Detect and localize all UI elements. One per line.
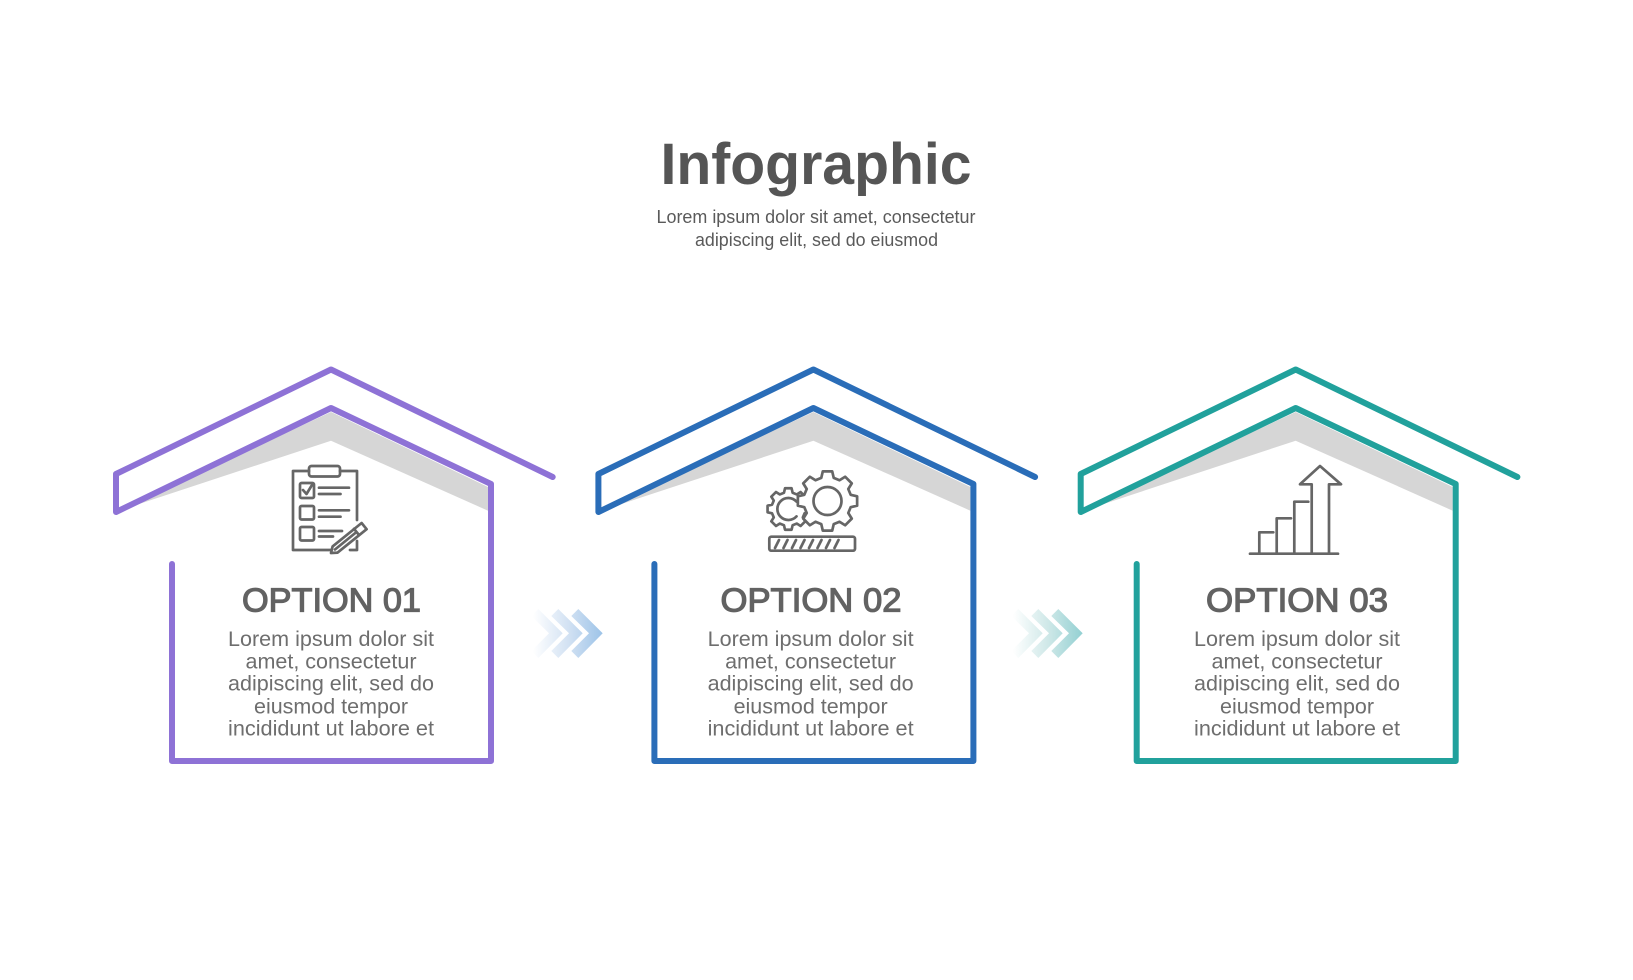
text block: option 01: adipiscing elit, sed do: [228, 672, 434, 696]
text block: option 03: adipiscing elit, sed do: [1194, 672, 1400, 696]
roof shadow: [1085, 412, 1453, 511]
text block: option 02: amet, consectetur: [725, 649, 896, 673]
heading: option 02: OPTION 02: [720, 583, 902, 620]
text block: option 02: adipiscing elit, sed do: [708, 672, 914, 696]
text block: option 02: eiusmod tempor: [734, 694, 888, 718]
text block: option 03: Lorem ipsum dolor sit: [1194, 627, 1400, 651]
arrow: chevrons teal: [1011, 609, 1083, 658]
text block: option 01: incididunt ut labore et: [228, 717, 434, 741]
text block: option 02: incididunt ut labore et: [708, 717, 914, 741]
panel: option 02: [598, 370, 1035, 761]
subtitle: Lorem ipsum dolor sit amet, consectetur: [656, 207, 976, 227]
subtitle: adipiscing elit, sed do eiusmod: [695, 230, 938, 250]
house outline: [116, 370, 553, 761]
text block: option 01: eiusmod tempor: [254, 694, 408, 718]
icon: gears and progress bar: [768, 471, 857, 551]
house outline: [1081, 370, 1517, 761]
text block: option 01: Lorem ipsum dolor sit: [228, 627, 434, 651]
panel: option 03: [1081, 370, 1517, 761]
subtitle: [656, 207, 976, 250]
text block: option 03: [1194, 627, 1400, 741]
icon: rising bar chart with arrow: [1250, 466, 1341, 554]
roof shadow: [602, 412, 970, 511]
text block: option 01: amet, consectetur: [246, 649, 416, 673]
text block: option 03: incididunt ut labore et: [1194, 717, 1400, 741]
roof shadow: [120, 412, 488, 511]
text block: option 01: [228, 627, 434, 741]
icon: clipboard checklist: [293, 466, 367, 553]
text block: option 02: [708, 627, 914, 741]
title: Infographic: [660, 132, 972, 197]
panel: option 01: [116, 370, 553, 761]
house outline: [598, 370, 1035, 761]
text block: option 02: Lorem ipsum dolor sit: [708, 627, 914, 651]
arrow: chevrons blue: [531, 609, 603, 658]
heading: option 01: OPTION 01: [242, 583, 421, 620]
text block: option 03: amet, consectetur: [1212, 649, 1382, 673]
text block: option 03: eiusmod tempor: [1220, 694, 1374, 718]
heading: option 03: OPTION 03: [1206, 583, 1388, 620]
